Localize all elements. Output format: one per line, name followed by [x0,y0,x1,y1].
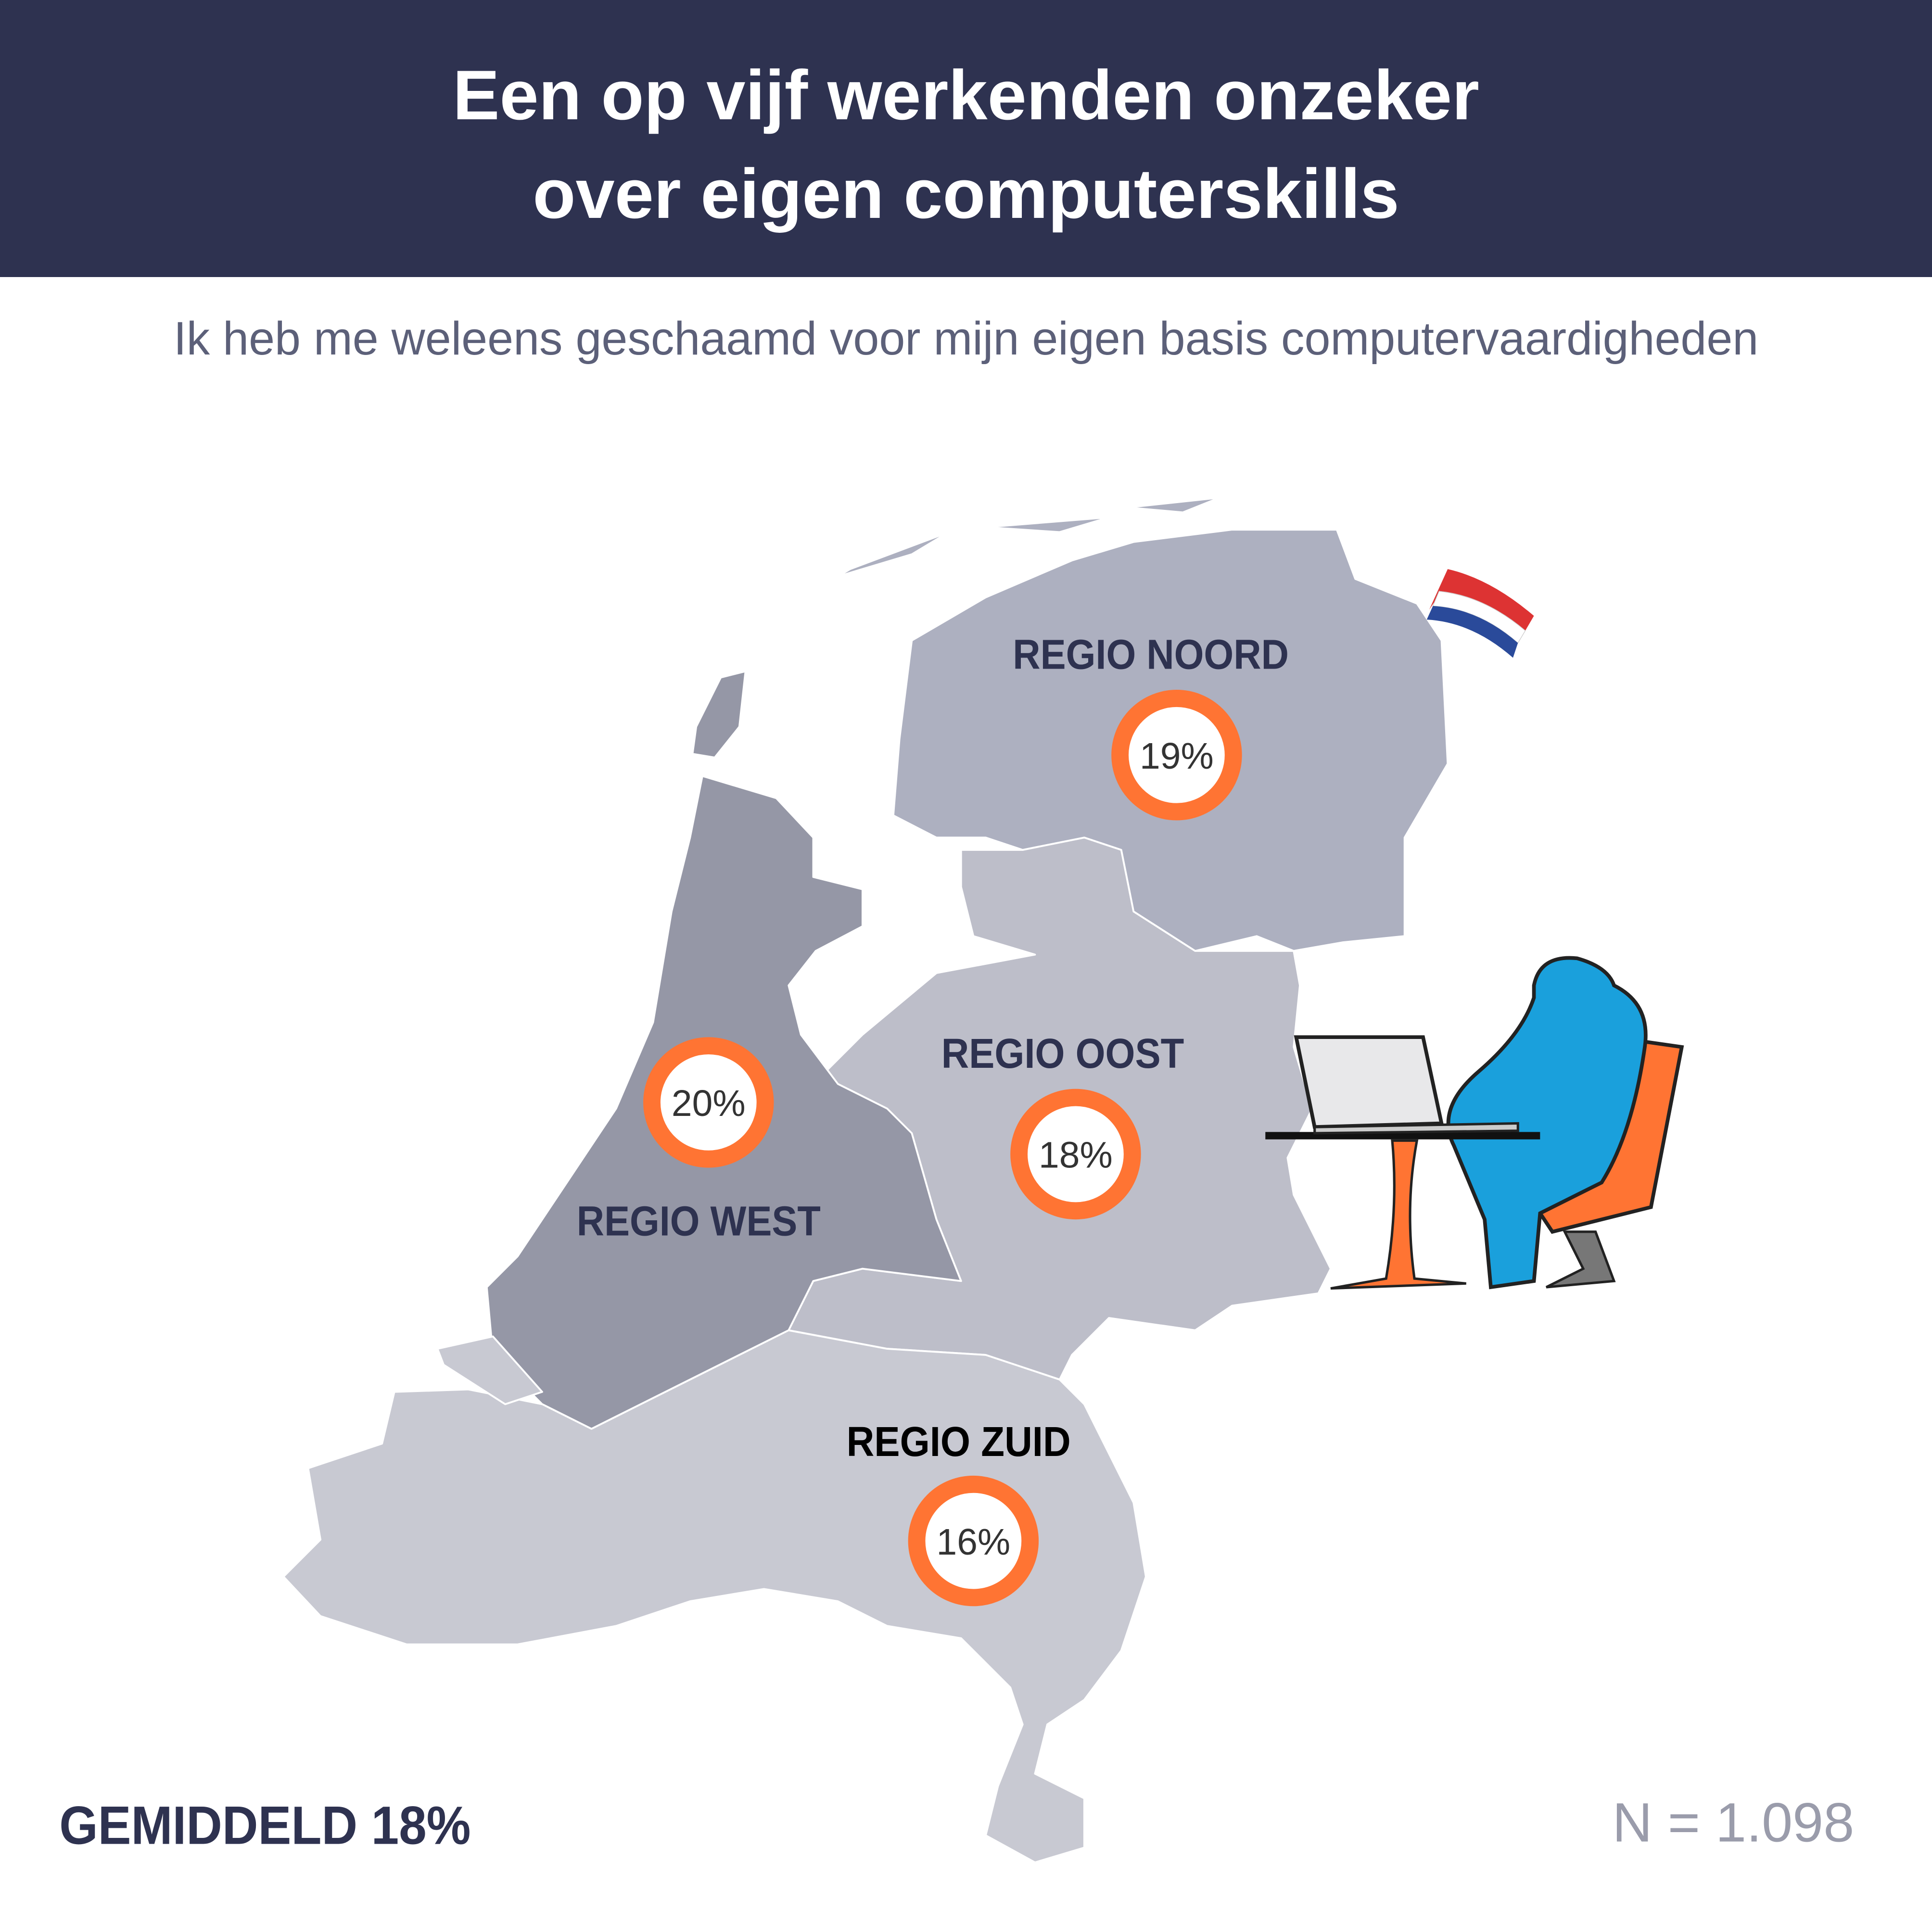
badge: Zuid 16% [917,1484,1030,1597]
footer: average: GEMIDDELD 18% [59,1795,471,1856]
badge: Noord 19%: 19% [1140,735,1214,777]
badge: West 20%: 20% [672,1083,746,1124]
label: REGIO NOORD: REGIO NOORD [1013,632,1289,678]
region: Zuid [283,1330,1146,1862]
badge: Oost 18%: 18% [1039,1135,1113,1176]
label: REGIO ZUID: REGIO ZUID [847,1418,1071,1465]
region: Noord [838,498,1448,951]
icon: Dutch flag [1427,569,1534,658]
label: REGIO WEST: REGIO WEST [577,1198,821,1245]
badge: West 20% [652,1046,765,1159]
badge: Noord 19% [1120,698,1233,812]
region: West [487,671,961,1429]
badge: Oost 18% [1019,1098,1132,1211]
map of the Netherlands [283,498,1448,1862]
badge: Zuid 16%: 16% [936,1521,1010,1563]
illustration: person at laptop [1265,958,1682,1289]
title: Een op vijf werkenden onzeker [453,56,1479,134]
region: Oost [788,837,1331,1380]
label: REGIO OOST: REGIO OOST [941,1030,1184,1077]
title [0,46,1932,243]
subtitle: Ik heb me weleens geschaamd voor mijn eigen basis computervaardigheden [174,312,1758,365]
header banner [0,0,1932,277]
title: over eigen computerskills [533,154,1399,233]
footer: sample size: N = 1.098 [1612,1792,1854,1853]
